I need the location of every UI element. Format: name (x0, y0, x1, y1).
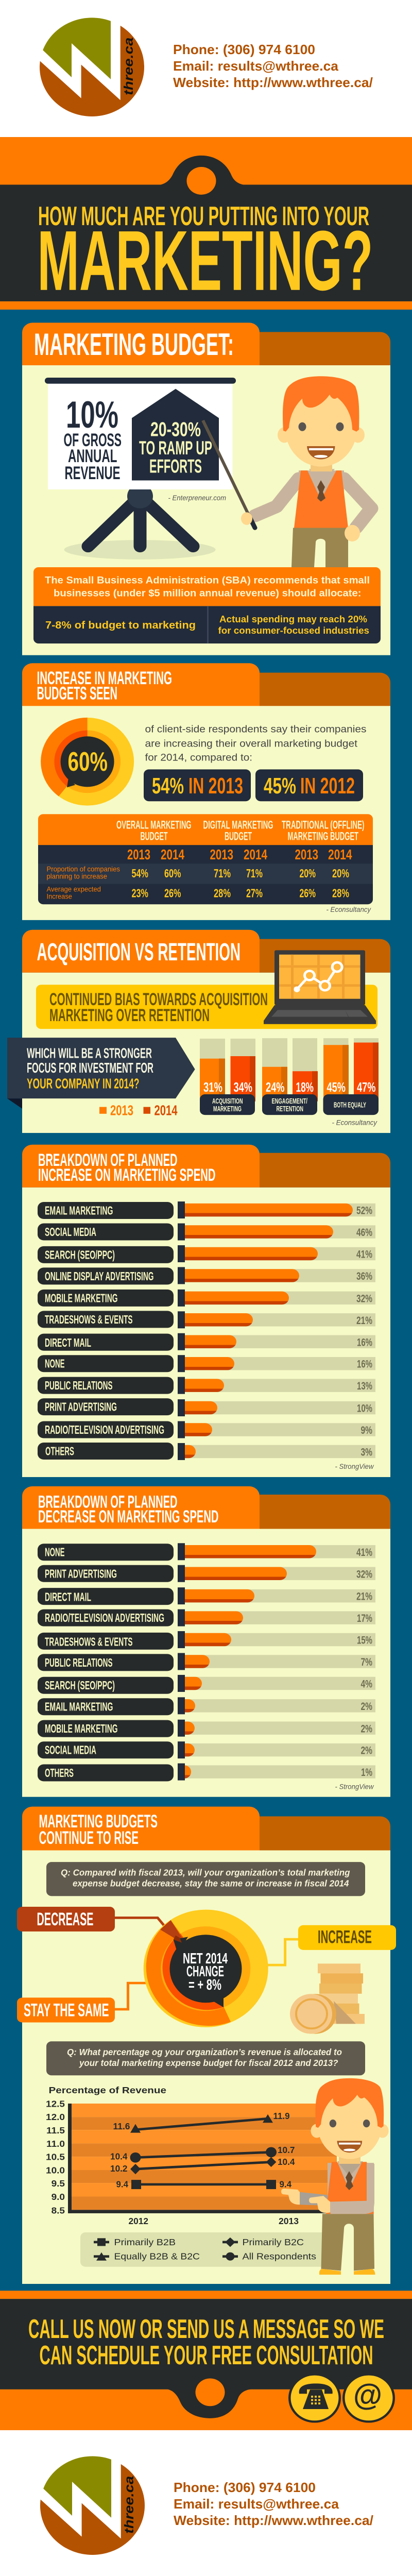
y axis labels: 12.5 (46, 2098, 65, 2109)
row: none (38, 1355, 375, 1372)
panel: marketing budget (22, 323, 390, 655)
row: search: 41% (356, 1248, 372, 1260)
row: social media (38, 1224, 375, 1241)
question box 1: expense budget decrease, stay the same or increase in fiscal 2014 (73, 1878, 349, 1888)
row: public relations (38, 1377, 375, 1394)
bar chart: acquisition, engagement, both: ACQUISITION (212, 1097, 243, 1106)
heading (39, 1811, 158, 1848)
heading: MARKETING BUDGETS (39, 1811, 158, 1832)
row: none: 41% (356, 1546, 372, 1558)
table: 28% (332, 887, 349, 900)
stat: 20-30% to ramp up efforts (132, 389, 219, 481)
row: radio and television (38, 1609, 375, 1626)
row: radio and television: 17% (357, 1612, 372, 1624)
source: - Econsultancy (327, 905, 371, 913)
contact text: Phone: (306) 974 6100 (173, 42, 315, 57)
source: - Econsultancy (332, 1118, 377, 1126)
table: OVERALL MARKETING (116, 818, 192, 831)
data labels: 11.9 (273, 2111, 290, 2121)
stat: 45% in 2012: IN 2012 (300, 774, 355, 799)
title banner (0, 137, 412, 310)
row: print advertising: PRINT ADVERTISING (45, 1400, 117, 1414)
y axis labels: 9.5 (52, 2178, 65, 2189)
label: increase (298, 1925, 396, 1950)
question box 1 (46, 1862, 365, 1896)
stat: 45% in 2012 (255, 769, 363, 801)
bar chart: acquisition, engagement, both: ENGAGEMENT/ (272, 1097, 307, 1106)
description: of client-side respondents say their companies (145, 724, 366, 735)
bar chart: acquisition, engagement, both: 31% (203, 1080, 222, 1095)
donut: 60% (41, 718, 134, 806)
x axis labels: 2012 (129, 2215, 148, 2226)
row: social media: SOCIAL MEDIA (45, 1226, 96, 1239)
row: social media: 46% (356, 1226, 372, 1239)
row: others: OTHERS (45, 1767, 74, 1780)
row: online display: 36% (356, 1270, 372, 1282)
table (38, 814, 373, 904)
row: direct mail: 16% (357, 1336, 372, 1348)
donut: net 2014 change (144, 1910, 268, 2027)
data labels: 10.4 (110, 2151, 128, 2161)
row: radio and television (38, 1421, 375, 1438)
row: public relations (38, 1653, 375, 1671)
contact text (173, 42, 373, 90)
y axis labels: 10.5 (46, 2151, 65, 2162)
row: others (38, 1443, 375, 1460)
table: 71% (246, 867, 263, 880)
row: public relations: 13% (357, 1380, 372, 1392)
table: 20% (332, 867, 349, 880)
icon: at sign (342, 2373, 395, 2423)
head (311, 2078, 389, 2159)
bar chart: acquisition, engagement, both: RETENTION (276, 1105, 303, 1113)
table: BUDGET (140, 829, 168, 843)
stat: 54% in 2013 (144, 769, 251, 801)
label: decrease: DECREASE (37, 1909, 94, 1929)
donut: net 2014 change: = + 8% (188, 1977, 221, 1993)
table: 2013 (210, 846, 233, 862)
row: direct mail: 21% (356, 1590, 372, 1603)
SBA recommendation box: 7-8% of budget to marketing (45, 619, 196, 631)
row: public relations: 7% (360, 1656, 372, 1668)
table: BUDGET (225, 829, 252, 843)
footer contact text: Phone: (306) 974 6100 (174, 2480, 316, 2495)
heading: MARKETING BUDGET: (34, 328, 234, 362)
bar chart: acquisition, engagement, both: MARKETING (213, 1105, 242, 1113)
data labels: 10.4 (278, 2156, 295, 2167)
row: others: 3% (360, 1446, 372, 1458)
y axis labels: 8.5 (52, 2205, 65, 2216)
data labels: 10.2 (110, 2163, 128, 2174)
source: - StrongView (335, 1783, 374, 1791)
row: direct mail: DIRECT MAIL (45, 1336, 91, 1350)
row: mobile marketing (38, 1720, 375, 1737)
series: primarily B2C (130, 2157, 276, 2174)
heading: CONTINUE TO RISE (39, 1827, 139, 1848)
header: logo and contact details (40, 18, 373, 116)
row: others: 1% (361, 1766, 372, 1778)
data labels: 9.4 (116, 2179, 129, 2189)
heading: ACQUISITION VS RETENTION (37, 938, 241, 966)
row: search (38, 1675, 375, 1694)
chart legend: Primarily B2B (114, 2237, 176, 2247)
x axis labels: 2013 (279, 2215, 299, 2226)
row: email marketing (38, 1201, 375, 1219)
stat: 54% in 2013: 54% (152, 774, 184, 799)
question box 2: Q: What percentage og your organization’s revenue is allocated to (67, 2047, 342, 2057)
data labels: 9.4 (280, 2179, 292, 2189)
row: others: OTHERS (45, 1445, 74, 1458)
y axis labels (46, 2098, 65, 2216)
table: 2014 (161, 846, 184, 862)
table: DIGITAL MARKETING (203, 818, 273, 831)
table: 71% (214, 867, 231, 880)
label: decrease (17, 1907, 115, 1931)
legend: 2013 and 2014: 2014 (154, 1102, 178, 1118)
row: social media: SOCIAL MEDIA (45, 1743, 96, 1757)
data labels: 10.7 (278, 2145, 295, 2155)
row: email marketing: 2% (360, 1700, 372, 1713)
callout: continued bias: MARKETING OVER RETENTION (49, 1006, 210, 1025)
arrow banner: question: WHICH WILL BE A STRONGER (27, 1045, 152, 1061)
row: tradeshows: TRADESHOWS & EVENTS (45, 1635, 133, 1649)
description: are increasing their overall marketing budget (145, 738, 357, 749)
row: search: SEARCH (SEO/PPC) (45, 1679, 115, 1692)
question box 2 (46, 2041, 365, 2075)
stat: 20-30% to ramp up efforts: TO RAMP UP (139, 438, 212, 459)
row: tradeshows: 15% (357, 1634, 372, 1646)
stat: 45% in 2012: 45% (264, 774, 296, 799)
row: print advertising (38, 1398, 375, 1416)
character presenter 2 (281, 2078, 389, 2275)
heading: BREAKDOWN OF PLANNED (38, 1150, 178, 1170)
easel with chart board (45, 378, 236, 560)
row: search: SEARCH (SEO/PPC) (45, 1248, 115, 1262)
question box 1: Q: Compared with fiscal 2013, will your organization’s total marketing (61, 1867, 350, 1877)
row: tradeshows (38, 1631, 375, 1650)
row: none: 16% (357, 1358, 372, 1370)
stat: 20-30% to ramp up efforts: 20-30% (150, 419, 201, 440)
heading: INCREASE ON MARKETING SPEND (38, 1165, 216, 1185)
row: online display: ONLINE DISPLAY ADVERTISING (45, 1270, 154, 1283)
footer contact text: Website: http://www.wthree.ca/ (174, 2513, 374, 2528)
description: for 2014, compared to: (145, 752, 252, 763)
legend: 2013 and 2014 (99, 1102, 178, 1118)
character presenter (203, 376, 371, 567)
row: mobile marketing: MOBILE MARKETING (45, 1722, 117, 1736)
row: none: NONE (45, 1546, 65, 1560)
row: mobile marketing: 2% (360, 1722, 372, 1735)
row: search (38, 1245, 375, 1263)
row: others (38, 1764, 375, 1782)
table: 26% (164, 887, 181, 900)
row: radio and television: RADIO/TELEVISION ADVERTISING (45, 1423, 164, 1437)
row: email marketing (38, 1697, 375, 1715)
row: tradeshows: 21% (356, 1314, 372, 1327)
table: 28% (214, 887, 231, 900)
chart legend: Equally B2B & B2C (114, 2251, 200, 2261)
heading: BUDGETS SEEN (37, 683, 117, 703)
table: 27% (246, 887, 263, 900)
row: direct mail (38, 1587, 375, 1605)
row: none (38, 1543, 375, 1561)
chart title: Percentage of Revenue (49, 2085, 166, 2095)
row: email marketing: EMAIL MARKETING (45, 1204, 113, 1217)
table: planning to increase (47, 873, 107, 881)
stat: 10% of gross annual revenue: OF GROSS (64, 430, 122, 450)
bar chart: acquisition, engagement, both: 45% (327, 1080, 346, 1095)
y axis labels: 10.0 (46, 2165, 65, 2175)
footer: logo and contact details (40, 2456, 373, 2555)
row: tradeshows (38, 1311, 375, 1328)
row: none: NONE (45, 1357, 65, 1371)
icon: telephone (288, 2373, 341, 2423)
row: public relations: PUBLIC RELATIONS (45, 1379, 113, 1393)
SBA recommendation box: Actual spending may reach 20% (219, 614, 367, 625)
arrow banner: question: FOCUS FOR INVESTMENT FOR (27, 1060, 153, 1076)
stat: 54% in 2013: IN 2013 (188, 774, 243, 799)
SBA recommendation box: for consumer-focused industries (218, 625, 369, 636)
row: print advertising (38, 1565, 375, 1582)
row: social media: 2% (360, 1744, 372, 1757)
table: 2014 (244, 846, 267, 862)
heading: DECREASE ON MARKETING SPEND (38, 1507, 219, 1527)
icon: coins (290, 1963, 365, 2034)
stat: 10% of gross annual revenue: ANNUAL (68, 446, 117, 466)
row: mobile marketing (38, 1290, 375, 1307)
call to action banner (0, 2291, 412, 2430)
SBA recommendation box: The Small Business Administration (SBA) recommends that small (45, 575, 370, 586)
bar chart: planned decrease (38, 1543, 375, 1782)
chart legend: All Respondents (243, 2251, 316, 2261)
CTA text (28, 2315, 384, 2370)
connector lines (115, 1918, 298, 2009)
footer contact text (174, 2480, 374, 2528)
label: stay the same: STAY THE SAME (24, 2000, 109, 2020)
panel: marketing budgets continue to rise (17, 1807, 396, 2284)
footer logo: three.ca (122, 2476, 136, 2534)
description (145, 724, 367, 763)
line chart: percentage of revenue (46, 2085, 337, 2226)
x axis labels (129, 2215, 299, 2226)
series: primarily B2B (131, 2180, 276, 2189)
SBA recommendation box (33, 567, 381, 643)
donut: 60%: 60% (68, 748, 108, 777)
arrow banner: question (7, 1038, 195, 1109)
y axis labels: 12.0 (46, 2112, 65, 2122)
footer logo (40, 2456, 145, 2555)
row: radio and television: RADIO/TELEVISION ADVERTISING (45, 1612, 164, 1625)
table: 2013 (127, 846, 150, 862)
heading (38, 1492, 219, 1527)
bar chart: acquisition, engagement, both: BOTH EQUALY (334, 1101, 366, 1109)
series: all respondents (130, 2147, 277, 2163)
heading: BREAKDOWN OF PLANNED (38, 1492, 178, 1512)
row: direct mail: DIRECT MAIL (45, 1590, 91, 1604)
SBA recommendation box: businesses (under $5 million annual revenue) should allocate: (54, 588, 362, 599)
table: 2013 (295, 846, 318, 862)
row: print advertising: 32% (356, 1568, 372, 1580)
row: social media (38, 1741, 375, 1758)
heading (38, 1150, 216, 1185)
heading (37, 668, 172, 703)
heading: INCREASE IN MARKETING (37, 668, 172, 688)
donut: net 2014 change: NET 2014 (183, 1951, 228, 1967)
row: print advertising: PRINT ADVERTISING (45, 1567, 117, 1581)
bar chart: acquisition, engagement, both (200, 1038, 379, 1115)
icon: at sign: @ (353, 2378, 382, 2412)
row: online display (38, 1267, 375, 1284)
series: equally B2B and B2C (130, 2114, 273, 2133)
logo: three.ca (122, 38, 136, 95)
label: stay the same (17, 1997, 115, 2022)
row: tradeshows: TRADESHOWS & EVENTS (45, 1313, 133, 1327)
footer contact text: Email: results@wthree.ca (174, 2497, 339, 2512)
contact text: Website: http://www.wthree.ca/ (173, 75, 373, 90)
panel: breakdown of planned increase (22, 1145, 390, 1477)
table: 54% (132, 867, 148, 880)
row: radio and television: 9% (360, 1424, 372, 1436)
stat: 10% of gross annual revenue: 10% (66, 394, 118, 436)
question box 2: your total marketing expense budget for fiscal 2012 and 2013? (79, 2057, 338, 2068)
data labels (110, 2111, 295, 2189)
callout: continued bias (36, 985, 377, 1029)
bar chart: acquisition, engagement, both: 47% (357, 1080, 375, 1095)
table: Increase (47, 893, 72, 901)
row: public relations: PUBLIC RELATIONS (45, 1656, 113, 1670)
bar chart: planned increase (38, 1201, 375, 1460)
bar chart: acquisition, engagement, both: 34% (234, 1080, 252, 1095)
bar chart: acquisition, engagement, both: 18% (296, 1080, 314, 1095)
row: mobile marketing: 32% (356, 1292, 372, 1304)
table: Proportion of companies (47, 866, 120, 873)
table: 2014 (328, 846, 352, 862)
y axis labels: 9.0 (52, 2191, 65, 2202)
row: print advertising: 10% (357, 1402, 372, 1414)
table: Average expected (47, 886, 101, 894)
row: direct mail (38, 1333, 375, 1351)
arrow banner: question: YOUR COMPANY IN 2014? (27, 1075, 140, 1091)
data labels: 11.6 (113, 2121, 130, 2131)
panel: acquisition vs retention (7, 930, 390, 1133)
legend: 2013 and 2014: 2013 (110, 1102, 133, 1118)
row: email marketing: 52% (356, 1204, 372, 1216)
source: - StrongView (335, 1462, 374, 1470)
logo (40, 18, 144, 116)
panel: increase in marketing budgets seen (22, 663, 390, 920)
donut: net 2014 change: CHANGE (186, 1964, 224, 1980)
source: - Enterpreneur.com (168, 494, 226, 502)
row: mobile marketing: MOBILE MARKETING (45, 1292, 117, 1305)
y axis labels: 11.5 (46, 2125, 65, 2136)
stat: 10% of gross annual revenue (64, 394, 122, 483)
table: 20% (300, 867, 316, 880)
table: 23% (132, 887, 148, 900)
table: 60% (164, 867, 181, 880)
y axis labels: 11.0 (46, 2138, 65, 2149)
bar chart: acquisition, engagement, both: 24% (266, 1080, 285, 1095)
stat: 20-30% to ramp up efforts: EFFORTS (149, 456, 202, 477)
table: 26% (300, 887, 316, 900)
icon: laptop with chart (264, 950, 376, 1024)
stat: 10% of gross annual revenue: REVENUE (65, 463, 121, 483)
row: search: 4% (360, 1677, 372, 1690)
chart legend (80, 2232, 333, 2267)
chart legend: Primarily B2C (243, 2237, 304, 2247)
panel: breakdown of planned decrease (22, 1486, 390, 1797)
row: email marketing: EMAIL MARKETING (45, 1700, 113, 1714)
contact text: Email: results@wthree.ca (173, 59, 339, 74)
